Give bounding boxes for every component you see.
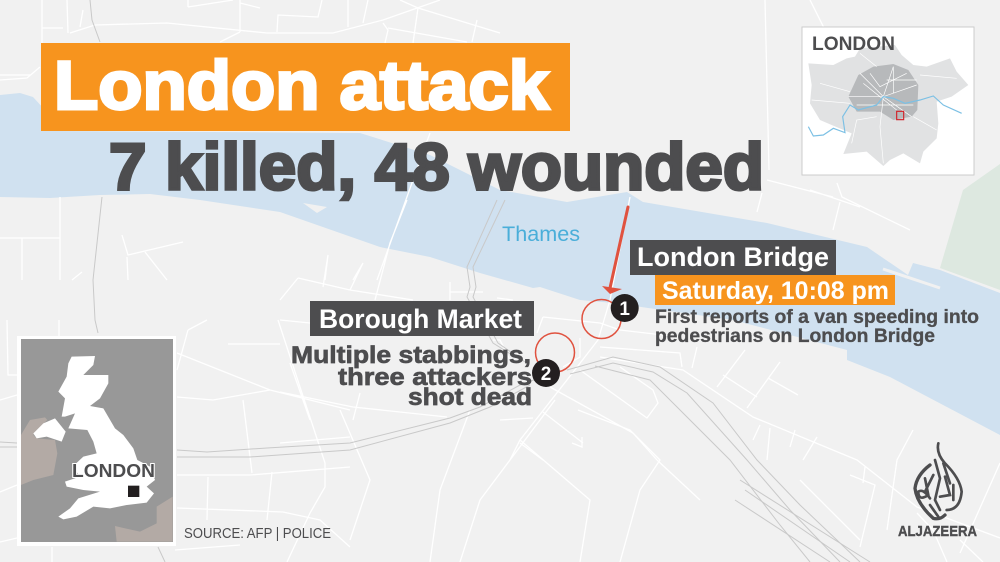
text: Borough Market description: Multiple stabbings, <box>291 342 531 369</box>
London marker <box>128 486 139 497</box>
central roads <box>500 197 1000 538</box>
Ireland <box>21 417 173 542</box>
river <box>808 96 962 136</box>
park <box>940 164 1000 290</box>
boroughs outer <box>808 45 968 166</box>
text: London Bridge description: pedestrians on London Bridge <box>655 326 935 347</box>
badge 1 <box>611 294 639 322</box>
inset: UK map <box>17 336 176 546</box>
text: London Bridge description: First reports of a van speeding into <box>655 307 979 328</box>
label: Thames: Thames <box>502 223 580 246</box>
text: Borough Market description: three attackers <box>338 364 532 391</box>
text: Borough Market description: shot dead <box>408 384 532 411</box>
marker: Borough Market circle <box>536 333 574 372</box>
logo: Al Jazeera <box>898 443 977 540</box>
north-east roads <box>757 0 910 230</box>
label: London Bridge: London Bridge <box>637 242 829 272</box>
source: SOURCE: AFP | POLICE <box>184 526 331 542</box>
casualty headline: 7 killed, 48 wounded <box>109 130 764 204</box>
roads <box>812 53 957 163</box>
Great Britain <box>58 356 155 519</box>
text: London Bridge description <box>655 307 979 347</box>
Northern Ireland <box>33 418 66 442</box>
label: time: Saturday, 10:08 pm <box>662 277 889 305</box>
badge 2 <box>532 359 560 387</box>
river Thames <box>0 93 1000 435</box>
text: Borough Market description <box>291 342 532 411</box>
inset: Greater London map <box>802 27 974 175</box>
north roads <box>0 0 500 80</box>
wordmark: ALJAZEERA <box>898 523 977 540</box>
badge 2: 2 <box>541 364 551 385</box>
marker: London Bridge circle <box>582 300 621 338</box>
title banner: London attack <box>54 47 550 124</box>
label: Borough Market: Borough Market <box>319 304 522 334</box>
boroughs inner <box>848 64 918 120</box>
label: LONDON: LONDON <box>812 34 895 55</box>
label: LONDON: LONDON <box>72 460 155 481</box>
west roads <box>0 133 513 323</box>
badge 1: 1 <box>619 299 630 320</box>
study area <box>897 111 904 120</box>
arrow to London Bridge <box>602 207 628 294</box>
